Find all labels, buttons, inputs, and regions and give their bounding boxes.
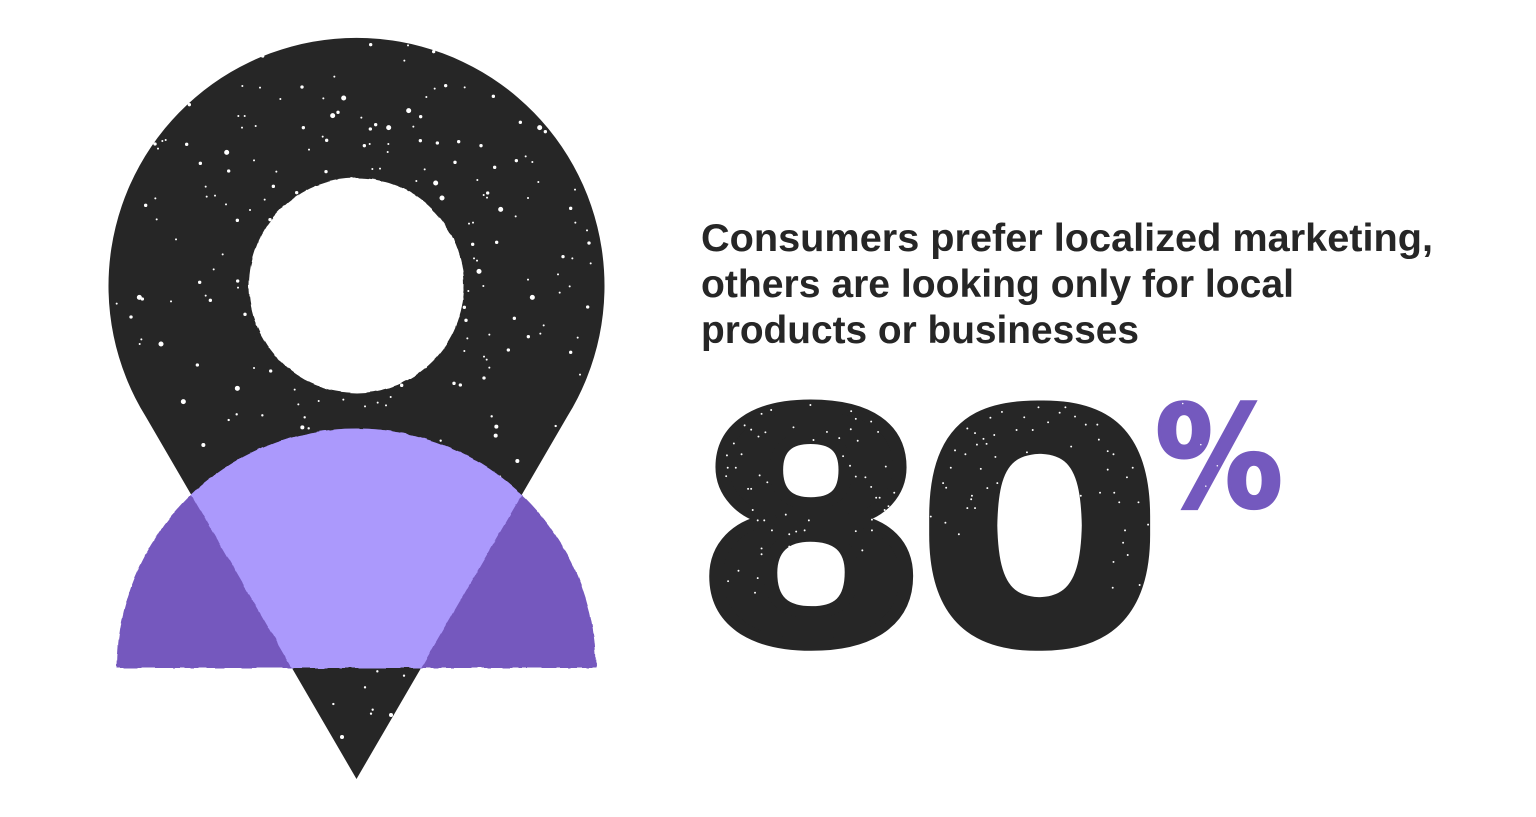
- icon: location pin: [108, 38, 604, 779]
- dark purple half disc: [117, 428, 596, 668]
- digit 0: 0: [914, 342, 1166, 708]
- pin speckles upper: [117, 45, 591, 406]
- pin speckles lower: [203, 414, 556, 737]
- number speckles: [726, 403, 1248, 641]
- headline: [701, 217, 1433, 352]
- semicircle overlay: [117, 428, 596, 668]
- pin hole: [249, 178, 464, 393]
- headline line 3: products or businesses: [701, 309, 1139, 352]
- digit 8: 8: [704, 336, 918, 713]
- big statistic 80%: [704, 336, 1283, 713]
- headline line 1: Consumers prefer localized marketing,: [701, 217, 1433, 260]
- percent sign: %: [1155, 375, 1283, 540]
- light purple overlap: [191, 428, 522, 669]
- headline line 2: others are looking only for local: [701, 263, 1294, 306]
- pin body: [108, 38, 604, 779]
